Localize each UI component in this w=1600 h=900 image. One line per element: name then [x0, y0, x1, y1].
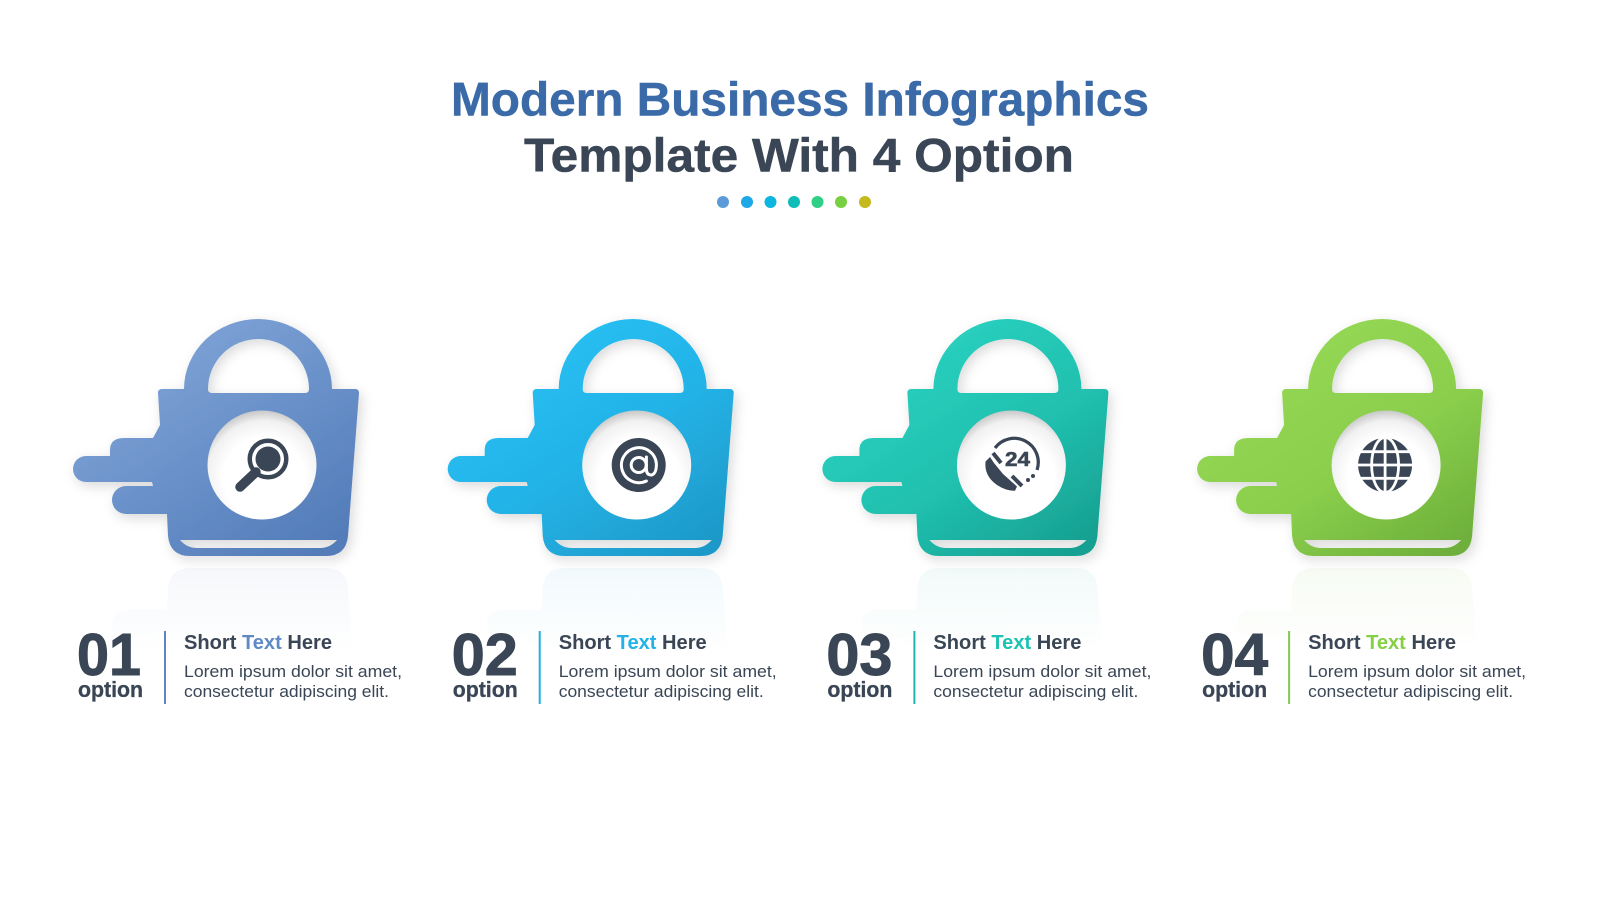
reflection 1	[73, 568, 359, 805]
body text 3: Lorem ipsum dolor sit amet,	[933, 662, 1151, 681]
body text 3: consectetur adipiscing elit.	[933, 682, 1138, 701]
heading 3: Short Text Here	[933, 632, 1081, 654]
title: Modern Business Infographics	[451, 72, 1149, 126]
lock shape 2	[448, 319, 734, 556]
title: Template With 4 Option	[524, 128, 1074, 182]
option label 2: option	[453, 677, 518, 702]
icon: magnifier	[240, 441, 286, 487]
reflection 4	[1197, 568, 1483, 805]
body text 1: Lorem ipsum dolor sit amet,	[184, 662, 402, 681]
divider 2	[539, 631, 541, 704]
number 2: 02	[452, 622, 518, 688]
body text 3	[933, 662, 1151, 701]
divider 1	[164, 631, 166, 704]
icon: 24 hour phone: 24	[1005, 449, 1031, 471]
number 4: 04	[1201, 622, 1268, 688]
panel: option 1	[73, 319, 402, 805]
divider 3	[913, 631, 915, 704]
body text 4	[1308, 662, 1526, 701]
option label 3: option	[827, 677, 892, 702]
title	[451, 72, 1149, 182]
body text 2: Lorem ipsum dolor sit amet,	[559, 662, 777, 681]
option label 4: option	[1202, 677, 1267, 702]
decorative dots row	[717, 196, 871, 208]
icon: at sign	[612, 438, 666, 492]
lock shape 3	[822, 319, 1108, 556]
icon: globe	[1357, 437, 1413, 493]
icon circle 1	[208, 410, 316, 520]
heading 1: Short Text Here	[184, 632, 332, 654]
body text 2: consectetur adipiscing elit.	[559, 682, 764, 701]
icon circle 4	[1332, 410, 1441, 520]
heading 2: Short Text Here	[559, 632, 707, 654]
icon circle 3	[957, 410, 1066, 520]
body text 1: consectetur adipiscing elit.	[184, 682, 389, 701]
panel: option 4	[1197, 319, 1526, 805]
body text 4: consectetur adipiscing elit.	[1308, 682, 1513, 701]
body text 4: Lorem ipsum dolor sit amet,	[1308, 662, 1526, 681]
panel: option 3	[822, 319, 1151, 805]
reflection 3	[822, 568, 1108, 805]
lock shape 1	[73, 319, 359, 556]
heading 4: Short Text Here	[1308, 632, 1456, 654]
number 1: 01	[77, 622, 141, 688]
body text 1	[184, 662, 402, 701]
option label 1: option	[78, 677, 143, 702]
number 3: 03	[826, 622, 892, 688]
icon: 24 hour phone	[985, 438, 1038, 491]
icon circle 2	[582, 410, 691, 520]
lock shape 4	[1197, 319, 1483, 556]
reflection 2	[448, 568, 734, 805]
panel: option 2	[448, 319, 777, 805]
body text 2	[559, 662, 777, 701]
divider 4	[1288, 631, 1290, 704]
